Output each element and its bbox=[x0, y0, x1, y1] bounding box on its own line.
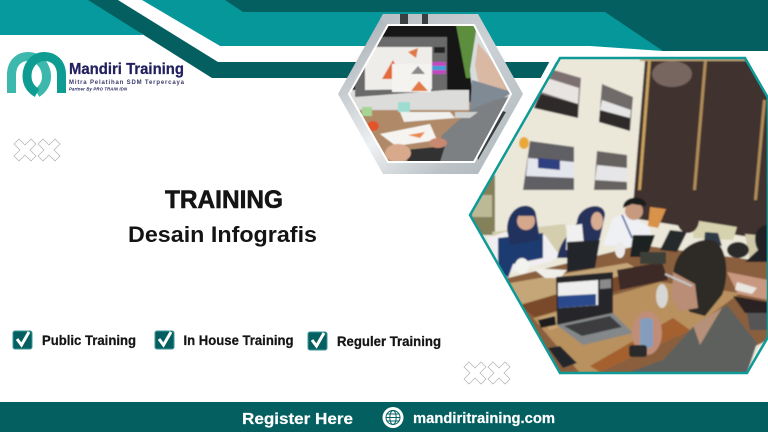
logo name: Mandiri Training bbox=[69, 61, 184, 78]
chairs bbox=[491, 224, 567, 252]
framed photographs bbox=[534, 68, 581, 118]
woman in navy hijab bbox=[487, 206, 560, 278]
logo tagline: Mitra Pelatihan SDM Terpercaya bbox=[69, 80, 185, 86]
foreground laptop bbox=[556, 272, 633, 345]
decorative crosses bottom bbox=[464, 362, 510, 384]
check item: reguler training: Reguler Training bbox=[337, 333, 441, 349]
tables bbox=[500, 245, 768, 373]
logo partner line: Partner By PRO TRAIN IDN bbox=[69, 86, 128, 92]
title: TRAINING bbox=[165, 186, 283, 214]
footer bar bbox=[0, 402, 768, 432]
icon: globe bbox=[382, 407, 404, 428]
check item: public training: Public Training bbox=[42, 332, 136, 348]
header banner shapes bbox=[0, 0, 768, 78]
logo mark bbox=[12, 56, 62, 93]
wall wood panels bbox=[632, 60, 768, 240]
decorative crosses top bbox=[14, 139, 60, 161]
check item: in house training bbox=[155, 331, 294, 349]
photo hexagon: training room bbox=[465, 50, 768, 380]
window at left bbox=[472, 174, 496, 236]
water glass bbox=[656, 284, 668, 308]
subtitle: Desain Infografis bbox=[128, 222, 317, 247]
person right edge bbox=[745, 225, 768, 262]
check item: public training bbox=[13, 331, 136, 349]
woman with hijab and laptop bbox=[557, 206, 605, 258]
register here: Register Here bbox=[242, 411, 353, 428]
photo hexagon: designer at monitor bbox=[338, 14, 523, 174]
background laptops and items bbox=[567, 240, 600, 272]
website: mandiritraining.com bbox=[413, 410, 555, 427]
man with lanyard bbox=[603, 198, 652, 247]
check item: in house training: In House Training bbox=[184, 332, 294, 348]
foreground man bbox=[627, 240, 757, 373]
logo bbox=[12, 56, 185, 93]
check item: reguler training bbox=[308, 332, 441, 350]
